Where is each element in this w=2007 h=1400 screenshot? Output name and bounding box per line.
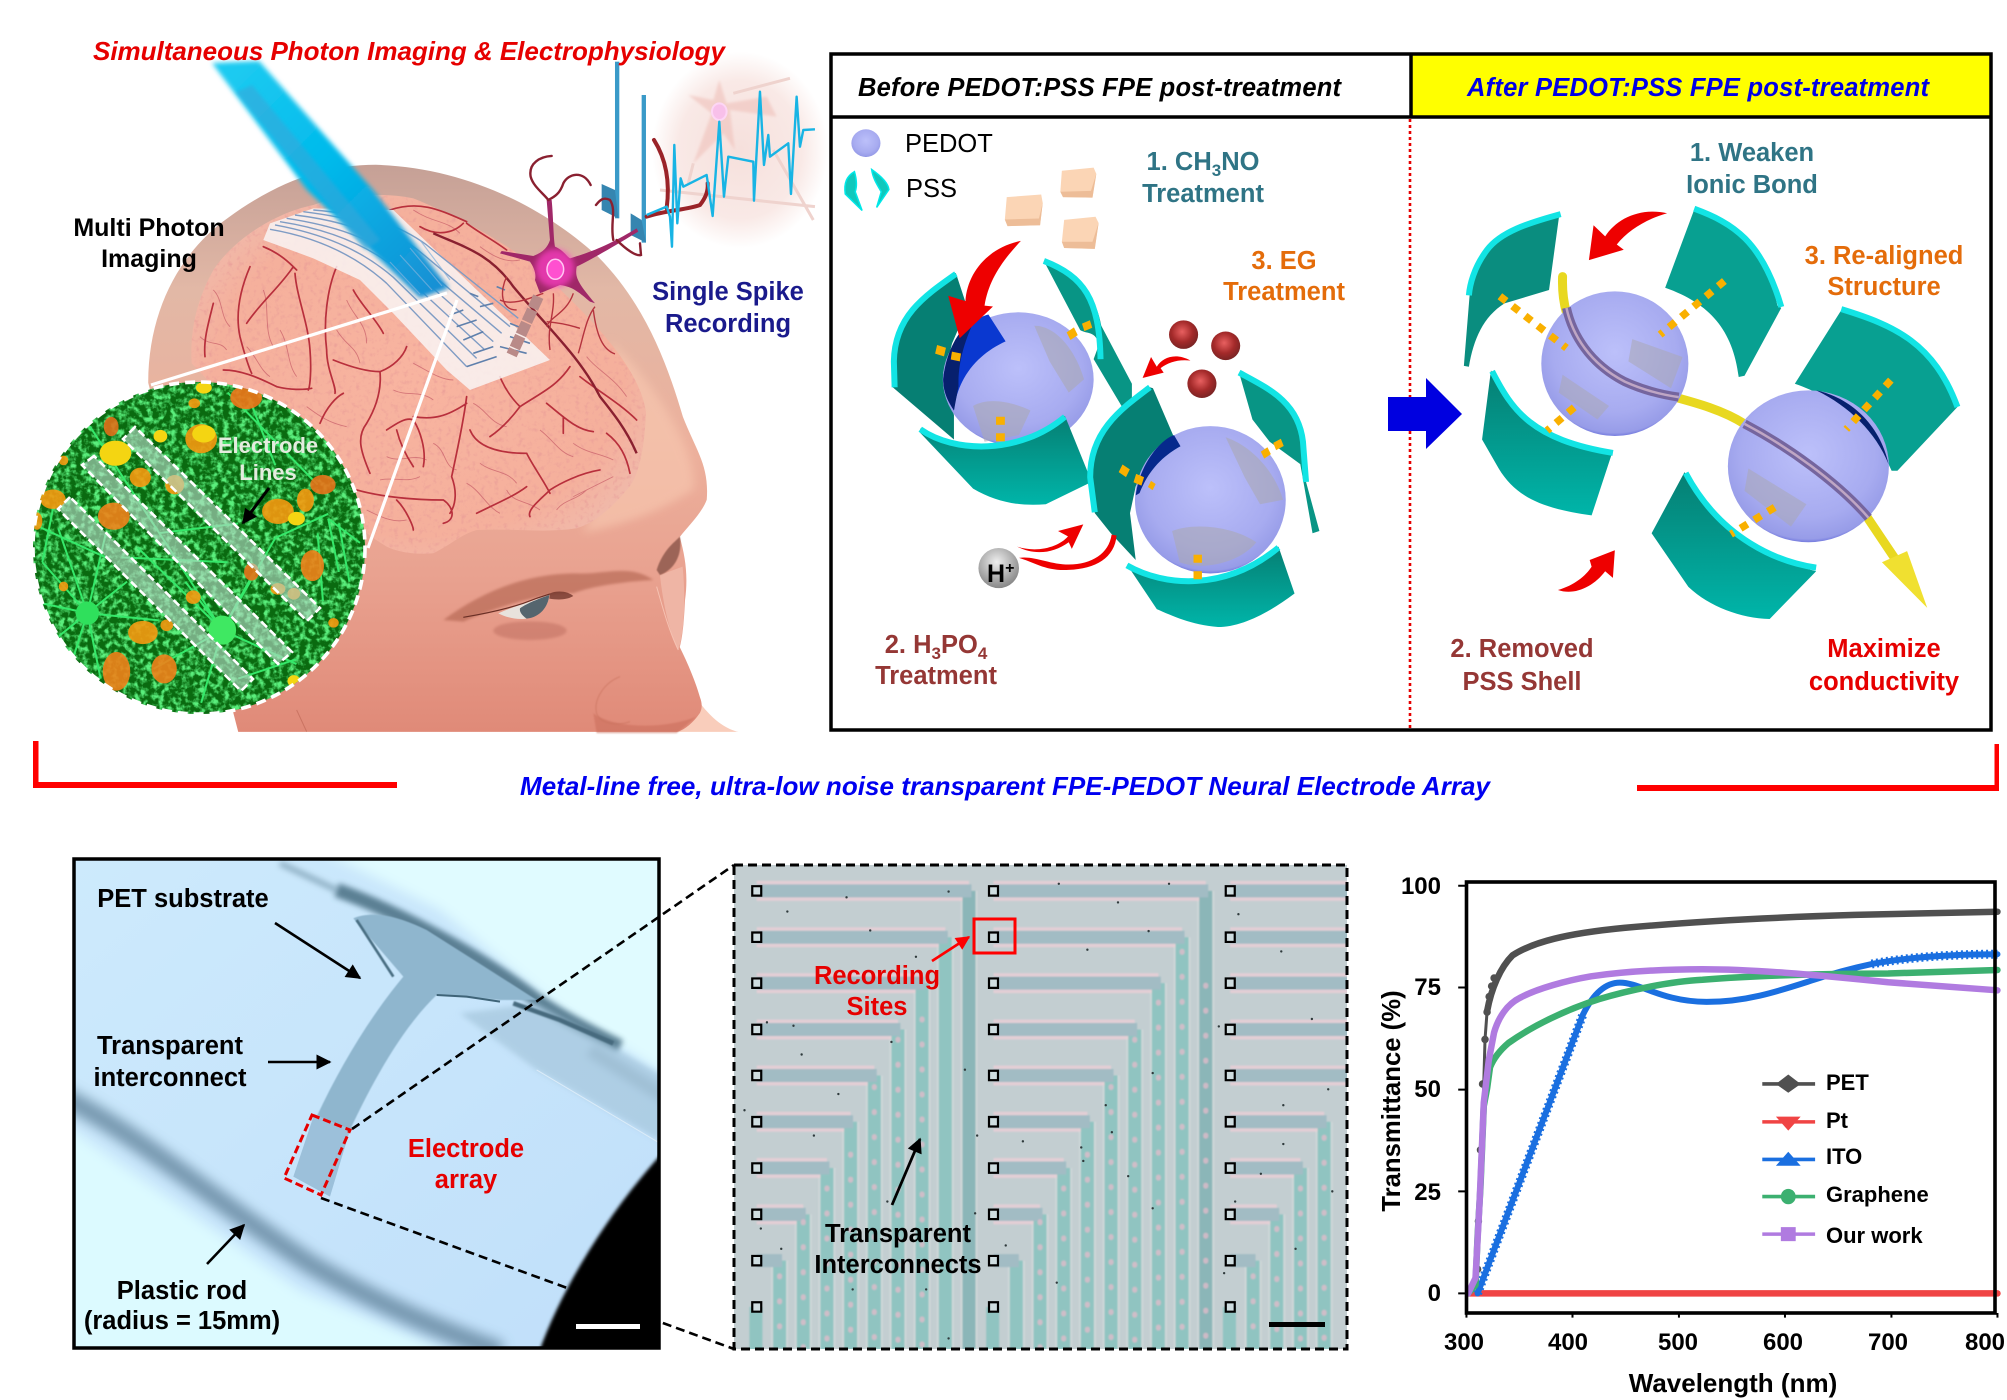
legend labels: Our work — [1826, 1223, 1923, 1248]
shells lower — [920, 373, 1319, 560]
EG balls — [1169, 320, 1240, 398]
divider — [1409, 119, 1411, 728]
label: multi photon imaging: Imaging — [101, 245, 197, 273]
wire highlight — [1566, 308, 1868, 518]
curves — [1458, 886, 1997, 1318]
label: electrode array: Electrode — [408, 1135, 524, 1163]
label: H3PO4 treatment: PO — [941, 631, 978, 659]
fine vessels — [200, 210, 627, 521]
legend label: PEDOT: PEDOT — [905, 130, 993, 158]
before-treatment diagram — [845, 129, 1319, 627]
arrow: transparent interconnect — [268, 1061, 330, 1063]
arrow: recording sites — [932, 937, 969, 961]
y axis labels: 0 — [1428, 1280, 1441, 1307]
speckles — [744, 884, 1332, 1338]
x axis title: Wavelength (nm) — [1629, 1368, 1837, 1398]
micrograph frame — [734, 865, 1347, 1349]
arrow: electrode lines — [243, 488, 269, 523]
PEDOT sphere 2 — [1135, 426, 1286, 573]
label: CH3NO treatment: Treatment — [1142, 180, 1264, 208]
spike trace — [647, 92, 815, 247]
arrows: red — [1589, 212, 1667, 260]
icon: eye — [463, 592, 573, 619]
y axis labels: 100 — [1401, 873, 1441, 900]
x axis labels — [1444, 1329, 2005, 1356]
arrow: CH3NO — [948, 241, 1021, 338]
arrow: removed shell — [1558, 550, 1615, 592]
label: single spike recording: Single Spike — [652, 278, 804, 306]
x axis labels: 300 — [1444, 1329, 1484, 1356]
far cheek — [660, 567, 684, 650]
ionic bonds — [935, 320, 1284, 579]
series: Graphene — [1468, 970, 1997, 1293]
y axis labels: 75 — [1414, 974, 1441, 1001]
x axis labels: 500 — [1658, 1329, 1698, 1356]
jaw crease — [297, 710, 307, 732]
electrode lines label: Electrode — [218, 433, 318, 458]
outer background wedges — [50, 850, 680, 1360]
photo — [76, 860, 658, 1346]
proton label: + — [1005, 560, 1014, 577]
electrode lines overlay — [58, 427, 320, 691]
label: electrode array: array — [435, 1166, 498, 1194]
label: H3PO4 treatment: 4 — [978, 644, 988, 663]
inset: fluorescence image — [32, 382, 365, 714]
head — [148, 165, 739, 732]
photo frame — [74, 859, 659, 1348]
heading: before: Before PEDOT:PSS FPE post-treatment — [858, 74, 1342, 102]
label: PET substrate: PET substrate — [97, 885, 269, 913]
label: weaken ionic bond: Ionic Bond — [1686, 171, 1818, 199]
label: recording sites: Recording — [814, 962, 940, 990]
label: CH3NO treatment: 3 — [1212, 161, 1221, 180]
after-treatment diagram — [1464, 209, 1957, 619]
scale bar — [1269, 1322, 1325, 1327]
label: re-aligned structure: Structure — [1827, 273, 1941, 301]
probe bars — [602, 62, 646, 243]
label: re-aligned structure: 3. Re-aligned — [1805, 242, 1963, 270]
far eye socket — [657, 537, 680, 575]
label: plastic rod: (radius = 15mm) — [84, 1307, 280, 1335]
series: PET plateau — [1487, 912, 1997, 1011]
heading: after: After PEDOT:PSS FPE post-treatment — [1466, 74, 1930, 102]
red box: recording site — [974, 919, 1015, 953]
series: Our work — [1468, 969, 1997, 1293]
banner caption: Metal-line free, ultra-low noise transparent FPE-PEDOT Neural Electrode Array — [520, 771, 1492, 801]
legend label: PSS: PSS — [906, 175, 957, 203]
electrode array film — [263, 208, 550, 390]
legend labels: PET — [1826, 1070, 1869, 1095]
label: transparent interconnect: interconnect — [93, 1064, 247, 1092]
tick marks — [1458, 886, 1997, 1318]
nostril wing — [596, 677, 630, 724]
legend icon: PSS — [845, 169, 889, 211]
legend labels: Graphene — [1826, 1182, 1929, 1207]
nose ridge — [657, 587, 678, 650]
PSS shells — [1464, 209, 1957, 619]
scale bar — [576, 1324, 640, 1329]
black corner — [538, 1155, 658, 1346]
bracket: left — [33, 741, 397, 788]
label: removed PSS shell: PSS Shell — [1462, 668, 1582, 696]
chart axes — [1466, 882, 1995, 1313]
label: H3PO4 treatment: 3 — [932, 644, 941, 663]
y axis labels: 50 — [1414, 1076, 1441, 1103]
panel: transmittance chart — [1378, 873, 2005, 1398]
icon: proton ball — [978, 548, 1019, 588]
electrode lines label: Lines — [239, 460, 297, 485]
label: maximize conductivity: Maximize — [1827, 635, 1941, 663]
panel: PEDOT:PSS post-treatment — [831, 54, 1991, 730]
axon — [512, 297, 538, 355]
brain — [191, 195, 646, 554]
conductive tracks — [756, 891, 1357, 1357]
PEDOT sphere 1 — [943, 312, 1094, 446]
label: H3PO4 treatment: Treatment — [875, 662, 997, 690]
cubes: CH3NO — [1005, 168, 1099, 249]
recording sites — [752, 886, 1235, 1312]
label: maximize conductivity: conductivity — [1809, 668, 1960, 696]
legend labels: ITO — [1826, 1144, 1862, 1169]
label: single spike recording: Recording — [665, 310, 791, 338]
dashed zoom lines — [321, 865, 734, 1349]
panel: brain imaging illustration — [32, 36, 828, 733]
lower rod edge — [59, 1095, 501, 1352]
series: ITO markers — [1478, 954, 1997, 1293]
x axis labels: 800 — [1965, 1329, 2005, 1356]
label: transparent interconnect: Transparent — [97, 1032, 243, 1060]
series: ITO — [1478, 954, 1997, 1293]
shell bottom — [1127, 547, 1295, 627]
micrograph — [734, 865, 1357, 1357]
dashed box: electrode array — [284, 1115, 350, 1195]
arrow: transparent interconnects — [892, 1139, 920, 1205]
label: removed PSS shell: 2. Removed — [1450, 635, 1594, 663]
legend swatches — [1762, 1075, 1815, 1241]
label: EG treatment: 3. EG — [1251, 247, 1317, 275]
arrow: before to after — [1388, 378, 1462, 449]
label: recording sites: Sites — [847, 993, 907, 1021]
nose base shadow — [593, 713, 697, 733]
film and back shadow — [280, 863, 670, 1197]
panel frame — [831, 54, 1991, 730]
bracket: right — [1637, 744, 1999, 791]
ionic bonds — [1500, 281, 1891, 534]
arrow head: conductivity — [1882, 551, 1927, 608]
neuron with spike recording — [500, 52, 828, 355]
series: PET markers — [1478, 978, 1494, 1269]
label: transparent interconnects: Transparent — [825, 1220, 971, 1248]
under-eye shadow — [493, 621, 567, 640]
label: weaken ionic bond: 1. Weaken — [1690, 139, 1814, 167]
conductive wire — [1562, 277, 1897, 562]
legend icon: PEDOT — [851, 129, 880, 157]
header: after post-treatment fill — [1412, 55, 1990, 116]
legend labels — [1826, 1070, 1929, 1248]
label: multi photon imaging: Multi Photon — [73, 214, 225, 242]
proton label: H — [987, 560, 1005, 588]
arrow: plastic rod — [207, 1225, 244, 1264]
brow shadow — [443, 571, 653, 622]
PSS shells — [893, 261, 1132, 440]
label: CH3NO treatment: NO — [1221, 148, 1259, 176]
y axis title: Transmittance (%) — [1378, 990, 1406, 1212]
title: Simultaneous Photon Imaging & Electrophysiology — [93, 36, 727, 66]
arrow: PET substrate — [275, 923, 360, 978]
x axis labels: 700 — [1868, 1329, 1908, 1356]
label: plastic rod: Plastic rod — [117, 1277, 247, 1305]
label: CH3NO treatment: 1. CH — [1147, 148, 1259, 180]
series: PET — [1468, 1011, 1487, 1293]
label: H3PO4 treatment: 2. H — [885, 631, 988, 663]
label: EG treatment: Treatment — [1223, 278, 1345, 306]
x axis labels: 600 — [1763, 1329, 1803, 1356]
neuron body — [500, 200, 638, 303]
arrow: proton path — [1019, 535, 1117, 570]
panel: micrograph of electrode array — [734, 865, 1357, 1357]
panel: flexible device photo — [50, 850, 734, 1360]
wire inside spheres — [1566, 308, 1868, 518]
neuron branches — [32, 393, 360, 703]
y axis labels: 25 — [1414, 1179, 1441, 1206]
label: transparent interconnects: Interconnects — [814, 1251, 982, 1279]
series: Pt — [1468, 1290, 1997, 1297]
face features — [297, 537, 697, 733]
arrow: EG — [1143, 356, 1190, 378]
arrow: H3PO4 — [1017, 524, 1083, 552]
cell bodies — [32, 386, 339, 691]
zoom lines — [151, 293, 457, 548]
y axis labels — [1401, 873, 1441, 1307]
laser beam — [212, 61, 450, 298]
x axis labels: 400 — [1548, 1329, 1588, 1356]
faded neuron photo — [652, 52, 828, 248]
legend labels: Pt — [1826, 1108, 1849, 1133]
PEDOT spheres — [1541, 291, 1889, 542]
upper rod edge right — [590, 1048, 657, 1100]
